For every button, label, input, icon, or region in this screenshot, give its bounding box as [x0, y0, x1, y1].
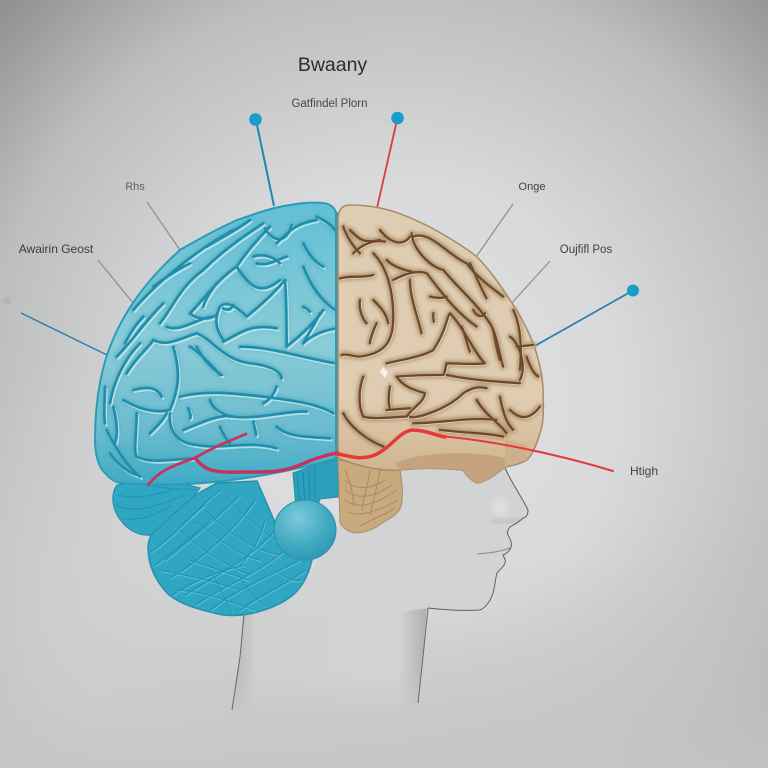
label: right: Oujfifl Pos — [560, 244, 612, 256]
label: top centre: Gatfindel Plorn — [291, 98, 368, 110]
pointer: right grey — [510, 261, 550, 305]
label: upper left: Rhs — [125, 181, 145, 193]
pointer: top left blue — [249, 113, 274, 206]
hemisphere: left blue — [95, 203, 338, 484]
label: left: Awairin Geost — [19, 242, 94, 256]
pointer: far left blue — [3, 297, 107, 355]
sphere: pituitary — [274, 500, 336, 560]
cerebellum: blue — [148, 481, 312, 615]
label: upper right: Onge — [519, 181, 545, 193]
hemisphere: right tan — [338, 205, 543, 483]
pointer: left grey — [98, 260, 133, 303]
pointer: upper left grey — [147, 202, 180, 250]
head silhouette — [225, 467, 528, 716]
label: lower right: Htigh — [630, 464, 658, 478]
title: Bwaany — [298, 54, 367, 76]
pointer: right blue — [533, 284, 639, 347]
blood vessel: red — [148, 430, 613, 485]
pointer: upper right grey — [476, 204, 513, 257]
lower lobe: tan — [338, 460, 402, 533]
pointer: top right red — [377, 112, 404, 208]
lower lobe: blue — [113, 478, 200, 535]
brainstem connector: blue — [293, 460, 338, 508]
